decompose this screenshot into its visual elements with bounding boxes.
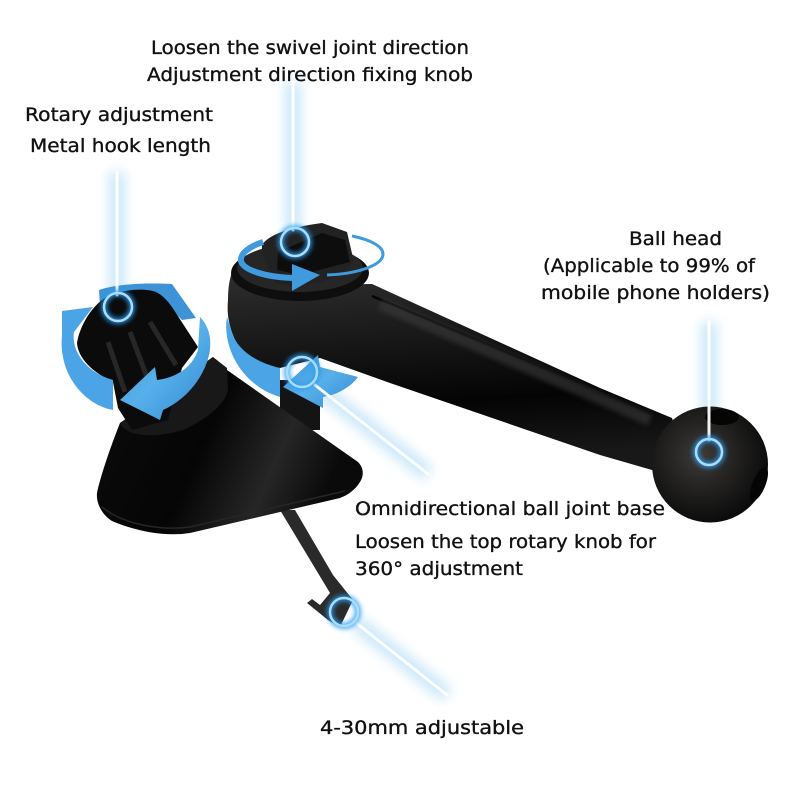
left band <box>226 317 280 397</box>
knob ridges <box>108 322 176 392</box>
callout lines <box>117 82 709 695</box>
swivel cap disc <box>231 245 369 301</box>
label: ball head: Ball head <box>629 228 722 250</box>
back arc <box>327 236 383 275</box>
cone <box>97 357 363 534</box>
swivel knob <box>262 223 354 286</box>
label: rotary adjustment: Rotary adjustment <box>25 104 213 126</box>
left arrow band <box>62 307 113 410</box>
front arc <box>241 242 293 278</box>
rotation arrow around swivel knob <box>241 236 383 291</box>
label: ball joint base <box>355 498 665 580</box>
top rotation arrow band behind knob <box>99 284 196 320</box>
ball joint base <box>97 357 363 534</box>
label: ball joint base: Loosen the top rotary knob for <box>355 531 656 553</box>
rotary knob <box>77 290 198 430</box>
label: ball joint base: 360° adjustment <box>355 558 523 580</box>
side hole <box>746 465 772 503</box>
collar <box>120 357 228 435</box>
label: hook range: 4-30mm adjustable <box>320 717 524 739</box>
label: ball head: (Applicable to 99% of <box>543 255 756 277</box>
arm groove <box>372 296 650 413</box>
arrowhead <box>292 264 320 291</box>
label: rotary adjustment <box>25 104 213 157</box>
arm highlight <box>380 304 650 420</box>
base lip <box>102 491 345 528</box>
right arrowhead band <box>283 355 358 408</box>
label: swivel knob <box>147 37 473 86</box>
hook <box>280 510 353 627</box>
post under arm <box>280 380 320 430</box>
glow lines <box>117 82 709 695</box>
ball <box>652 406 768 522</box>
ring lines <box>104 228 722 626</box>
top hole <box>705 409 739 425</box>
label: swivel knob: Adjustment direction fixing knob <box>147 64 473 86</box>
label: ball joint base: Omnidirectional ball joint base <box>355 498 665 520</box>
ball head <box>652 406 772 522</box>
marker rings <box>104 228 722 626</box>
label: swivel knob: Loosen the swivel joint direction <box>151 37 469 59</box>
phone holder arm <box>228 223 690 470</box>
rotation arrows around ball joint <box>226 317 358 408</box>
rotation arrows around knob <box>62 307 210 420</box>
ring glow <box>104 228 722 626</box>
right arrow band <box>120 317 210 420</box>
arm body <box>228 258 690 470</box>
label: rotary adjustment: Metal hook length <box>30 135 211 157</box>
label: ball head <box>541 228 770 304</box>
label: ball head: mobile phone holders) <box>541 282 770 304</box>
